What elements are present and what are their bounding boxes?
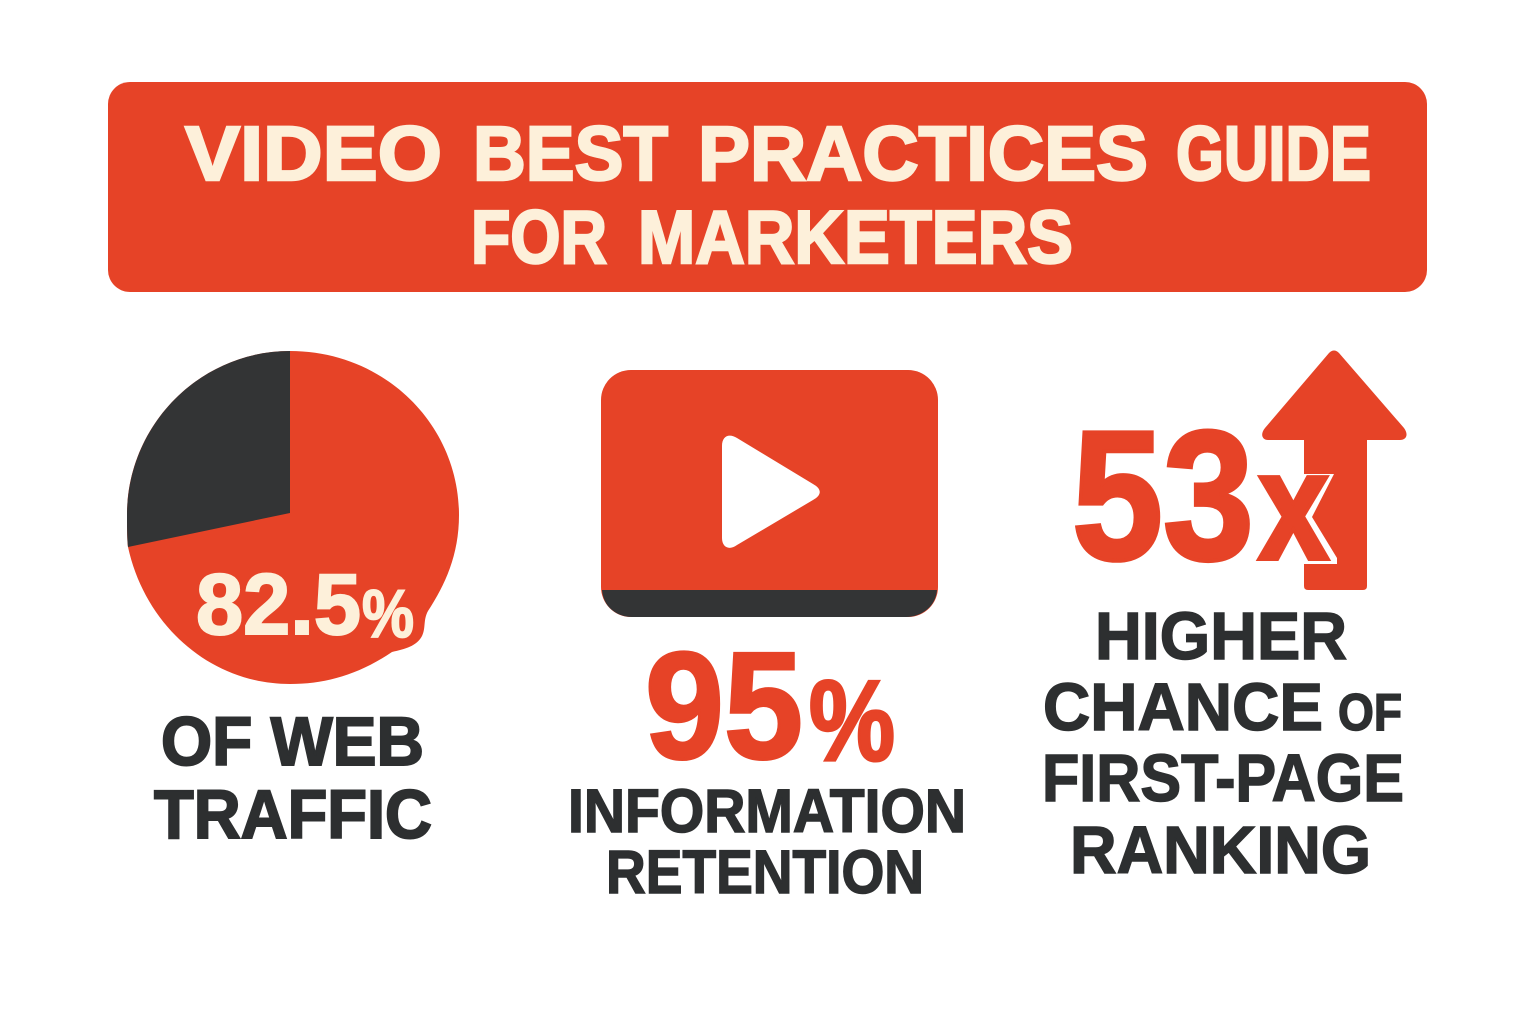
panel: first-page ranking	[1042, 350, 1407, 888]
label: of web traffic: OF WEB	[161, 703, 424, 780]
title text: PRACTICES	[698, 111, 1148, 197]
label: higher chance of first-page ranking: RANKING	[1070, 813, 1371, 888]
label: higher chance of first-page ranking: HIGHER	[1095, 599, 1347, 674]
icon: play triangle	[722, 436, 820, 548]
stat: 95%	[645, 621, 895, 791]
stat: 82.5%: 82.5	[196, 557, 361, 653]
stat: 82.5%: %	[362, 576, 414, 652]
title text: MARKETERS	[638, 195, 1073, 279]
stat: 95%: %	[809, 658, 895, 785]
label: higher chance of first-page ranking	[1042, 599, 1404, 888]
panel: information retention	[568, 370, 966, 906]
label: of web traffic	[154, 703, 432, 853]
title text	[185, 111, 1371, 279]
title text: GUIDE	[1176, 111, 1371, 197]
label: higher chance of first-page ranking: FIRST-PAGE	[1042, 741, 1404, 816]
label: information retention: RETENTION	[606, 838, 924, 906]
stat: 53x: x	[1258, 419, 1329, 592]
pie chart	[127, 351, 459, 684]
title text: FOR	[471, 195, 607, 279]
label: of web traffic: TRAFFIC	[154, 776, 432, 853]
stat: 53x: 53	[1072, 392, 1254, 598]
label: higher chance of first-page ranking: OF	[1338, 684, 1402, 742]
label: information retention: INFORMATION	[568, 777, 966, 845]
label: higher chance of first-page ranking: CHANCE	[1043, 670, 1323, 745]
icon: up arrow	[1262, 350, 1407, 590]
title text: VIDEO	[185, 111, 442, 197]
title banner	[108, 82, 1427, 292]
stat: 95%: 95	[645, 621, 803, 791]
icon: video player	[601, 370, 938, 617]
panel: web traffic	[127, 351, 459, 853]
title text: BEST	[473, 111, 668, 197]
label: information retention	[568, 777, 966, 906]
